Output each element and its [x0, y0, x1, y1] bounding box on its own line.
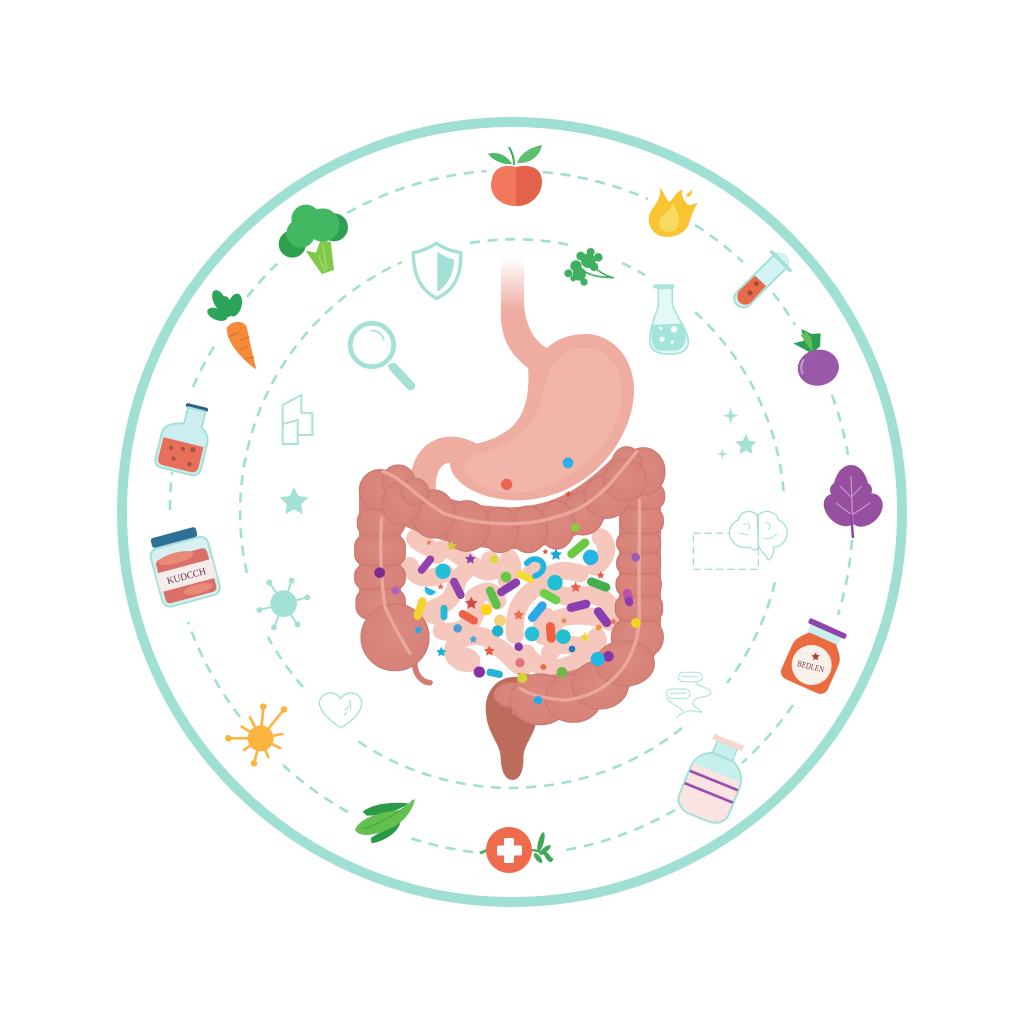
- icon: star: [280, 487, 308, 514]
- icon: jam jar: BEDLEN: [796, 658, 826, 675]
- stomach and esophagus: [423, 258, 634, 500]
- icon: turnip: [793, 329, 842, 389]
- icon: apple: [488, 145, 542, 206]
- middle dashed orbit: [170, 171, 852, 852]
- inner dashed orbit: [240, 239, 784, 788]
- icon: gut outline: [667, 672, 711, 718]
- colon stripe: [381, 452, 639, 700]
- icon: parsley: [564, 248, 614, 286]
- icon: test tube: [737, 252, 790, 305]
- icon: heart outline: [319, 693, 362, 728]
- gut bacteria pills: [418, 543, 629, 674]
- icon: kimchi jar: [146, 524, 222, 608]
- large intestine segments: [355, 447, 665, 725]
- icon: broccoli: [279, 205, 348, 274]
- sparkle icons: [717, 408, 756, 459]
- icon: shield: [413, 243, 461, 298]
- icon: carrot: [205, 288, 256, 369]
- small intestine loops: [410, 537, 611, 668]
- gut bacteria cocci: [374, 523, 641, 705]
- icon: flame: [649, 187, 698, 237]
- icon: kimchi jar: KUDCCH: [166, 566, 207, 587]
- icon: brain with dashed box: [693, 511, 787, 569]
- icon: potion bottle: [154, 399, 216, 477]
- large intestine body: [380, 473, 640, 697]
- outer ring: [122, 122, 902, 902]
- icon: medical cross tomato: [480, 827, 553, 873]
- appendix: [415, 660, 430, 683]
- icon: flask: [650, 284, 688, 354]
- icon: pink bottle: [674, 730, 755, 828]
- gut bacteria stars: [414, 491, 617, 656]
- icon: purple leaf: [817, 465, 889, 538]
- icon: jam jar: [778, 616, 851, 696]
- icon: teal virus: [256, 578, 310, 630]
- intestines: [355, 447, 665, 780]
- rectum: [486, 677, 537, 780]
- stomach microbes: [501, 458, 573, 490]
- icon: magnifying glass: [350, 323, 411, 386]
- icon: block outline: [283, 395, 312, 444]
- icon: orange virus: [225, 703, 287, 767]
- icon: spinach: [355, 798, 415, 843]
